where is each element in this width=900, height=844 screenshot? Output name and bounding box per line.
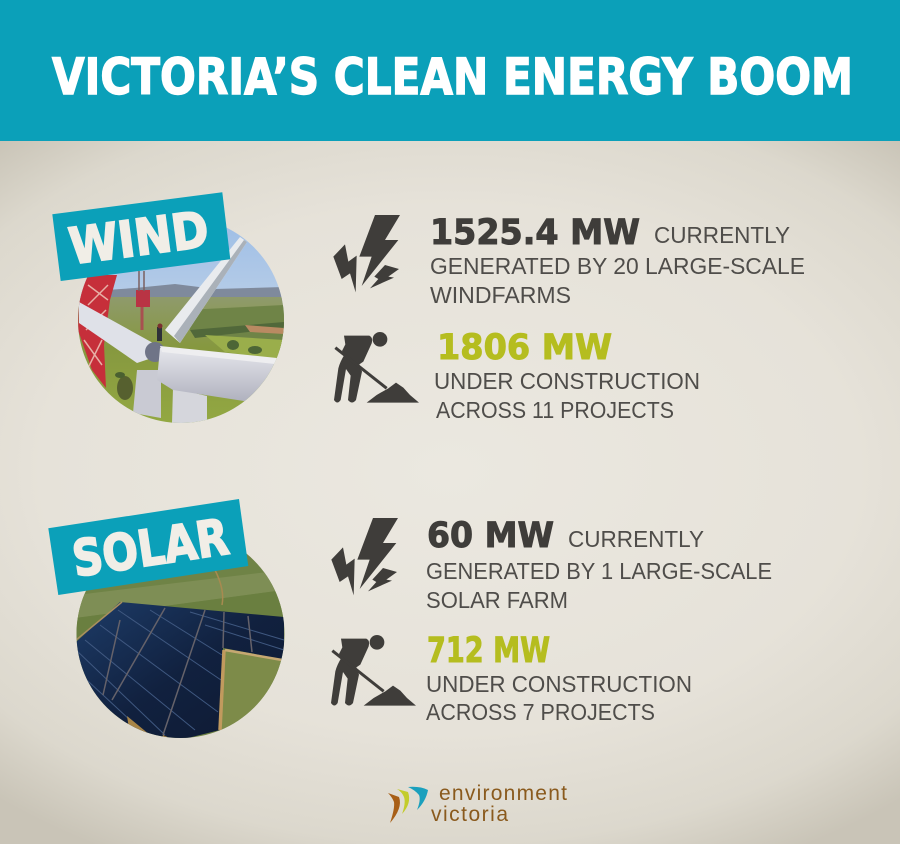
header banner	[0, 0, 900, 141]
solar construction stat: ACROSS 7 PROJECTS	[426, 699, 655, 725]
solar construction stat	[426, 631, 692, 725]
solar construction stat: UNDER CONSTRUCTION	[426, 671, 692, 697]
solar current stat: GENERATED BY 1 LARGE-SCALE	[426, 558, 772, 584]
icon: solar lightning	[331, 518, 398, 595]
icon: wind construction worker	[334, 332, 419, 403]
logo: environment victoria: environment	[439, 782, 567, 805]
roads and scrub	[220, 652, 282, 730]
solar current stat: SOLAR FARM	[426, 587, 568, 613]
logo: environment victoria: victoria	[431, 803, 508, 826]
wind construction stat: UNDER CONSTRUCTION	[434, 368, 700, 394]
logo: environment victoria	[388, 782, 567, 826]
wind current stat: 1525.4 MW	[430, 213, 640, 253]
solar current stat: CURRENTLY	[568, 526, 704, 552]
wind current stat	[430, 213, 805, 308]
blades	[79, 302, 155, 363]
wind construction stat	[434, 328, 700, 423]
crane tower	[78, 275, 117, 388]
wind construction stat: 1806 MW	[437, 328, 612, 368]
solar current stat: 60 MW	[427, 516, 554, 556]
solar construction stat: 712 MW	[427, 631, 550, 671]
nacelle	[157, 348, 277, 403]
towers	[133, 370, 161, 418]
wind current stat: CURRENTLY	[654, 222, 790, 248]
solar current stat	[426, 516, 772, 613]
icon: wind lightning	[333, 215, 400, 292]
photo: wind turbine	[78, 217, 284, 423]
wind current stat: GENERATED BY 20 LARGE-SCALE	[430, 253, 805, 279]
label: SOLAR: SOLAR	[69, 508, 232, 588]
photo: solar farm	[76, 554, 284, 738]
wind current stat: WINDFARMS	[430, 282, 571, 308]
wind construction stat: ACROSS 11 PROJECTS	[436, 397, 674, 423]
label: WIND: WIND	[66, 200, 212, 276]
technician	[157, 327, 162, 341]
panels	[76, 602, 284, 745]
icon: solar construction worker	[331, 635, 416, 706]
crane hook	[136, 290, 150, 307]
